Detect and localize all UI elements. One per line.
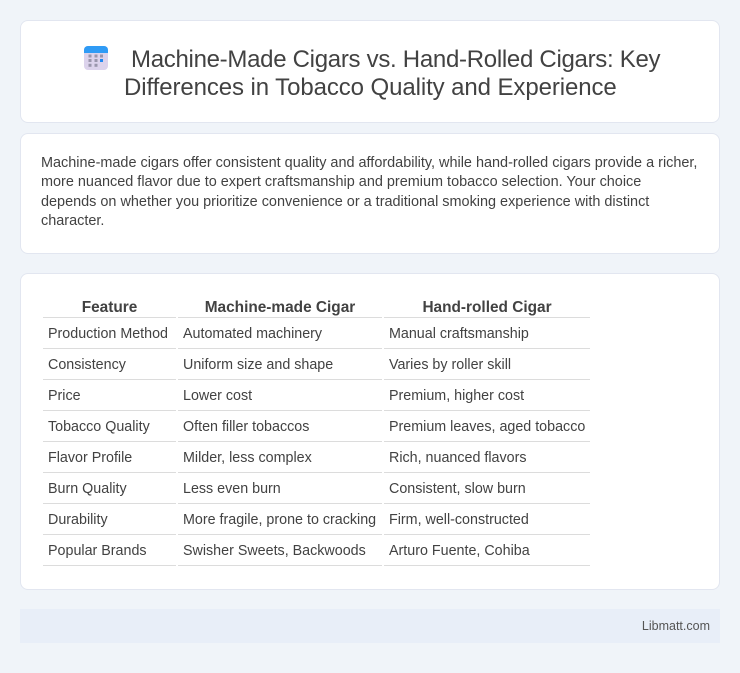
intro text: more nuanced flavor due to expert craftsmanship and premium tobacco selection. Your choice bbox=[41, 174, 641, 190]
comparison table: Feature bbox=[82, 299, 137, 316]
title: Machine-Made Cigars vs. Hand-Rolled Cigars: Key bbox=[131, 46, 660, 73]
intro text: character. bbox=[41, 213, 104, 229]
comparison table: Popular Brands bbox=[48, 543, 147, 559]
intro text bbox=[41, 155, 697, 229]
title bbox=[124, 46, 660, 101]
title: Differences in Tobacco Quality and Experience bbox=[124, 74, 617, 101]
comparison table: Durability bbox=[48, 512, 108, 528]
comparison table: Hand-rolled Cigar bbox=[422, 299, 552, 316]
intro text: Machine-made cigars offer consistent quality and affordability, while hand-rolled cigars provide a richer, bbox=[41, 155, 697, 171]
comparison table bbox=[43, 299, 590, 566]
comparison table: Price bbox=[48, 388, 81, 404]
panel: table card bbox=[20, 273, 720, 590]
panel: title card bbox=[20, 20, 720, 123]
comparison table: Tobacco Quality bbox=[48, 419, 150, 435]
footer bar bbox=[20, 609, 720, 643]
comparison table: Flavor Profile bbox=[48, 450, 132, 466]
comparison table: Often filler tobaccos bbox=[183, 419, 309, 435]
comparison table: Premium, higher cost bbox=[389, 388, 524, 404]
comparison table: Consistent, slow burn bbox=[389, 481, 526, 497]
comparison table: Lower cost bbox=[183, 388, 252, 404]
comparison table: Burn Quality bbox=[48, 481, 127, 497]
comparison table: Less even burn bbox=[183, 481, 281, 497]
panel: intro card bbox=[20, 133, 720, 254]
footer credit: Libmatt.com bbox=[642, 619, 710, 633]
comparison table: Milder, less complex bbox=[183, 450, 312, 466]
comparison table: Uniform size and shape bbox=[183, 357, 333, 373]
intro text: depends on whether you prioritize convenience or a traditional smoking experience with distinct bbox=[41, 194, 649, 210]
comparison table: Machine-made Cigar bbox=[205, 299, 355, 316]
comparison table: Manual craftsmanship bbox=[389, 326, 529, 342]
comparison table: Arturo Fuente, Cohiba bbox=[389, 543, 530, 559]
comparison table: Varies by roller skill bbox=[389, 357, 511, 373]
icon: calendar bbox=[84, 46, 108, 70]
comparison table: Production Method bbox=[48, 326, 168, 342]
comparison table: Firm, well-constructed bbox=[389, 512, 529, 528]
comparison table: Automated machinery bbox=[183, 326, 322, 342]
comparison table: Swisher Sweets, Backwoods bbox=[183, 543, 366, 559]
comparison table: Rich, nuanced flavors bbox=[389, 450, 526, 466]
comparison table: Premium leaves, aged tobacco bbox=[389, 419, 585, 435]
comparison table: More fragile, prone to cracking bbox=[183, 512, 376, 528]
comparison table: Consistency bbox=[48, 357, 126, 373]
